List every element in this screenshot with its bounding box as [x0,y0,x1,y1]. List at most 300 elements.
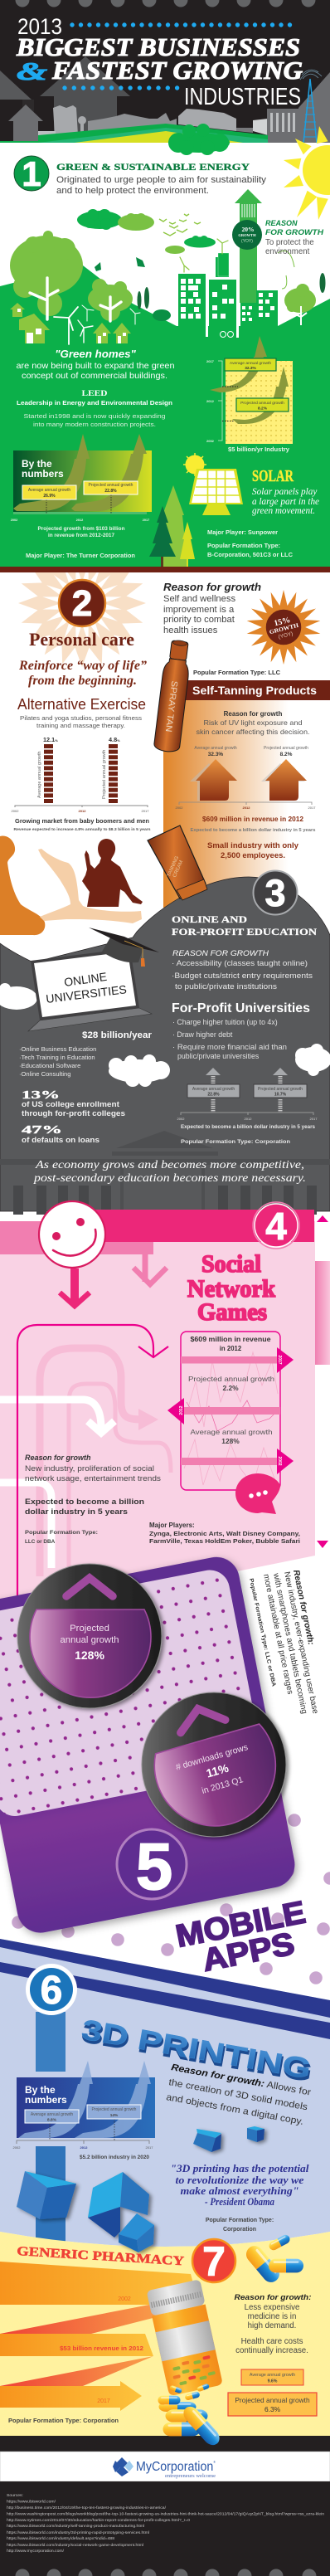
text: pharmacy reason: continually increase. [235,2346,308,2355]
section 1 description [56,175,267,196]
icon: laptop with online universities [28,948,152,1031]
heading: ampersand: & [17,56,47,85]
heading: biggest businesses: BIGGEST BUSINESSES [16,32,300,61]
text: solar description [252,487,319,516]
list: online topics: ·Tech Training in Education [19,1054,95,1061]
text: self-tanning reason: skin cancer affecting this decision. [196,728,310,736]
text: reason for growth personal care: health issues [163,626,218,635]
badge: number 5: 5 [136,1829,172,1903]
dial: downloads grows: # downloads grows [175,1742,249,1773]
text: pharmacy reason: Less expensive [245,2303,299,2312]
footer sources panel [0,2481,330,2576]
text: green homes: "Green homes" [55,348,136,360]
buildings [178,253,278,338]
heading: for-profit universities: For-Profit Universities [172,1001,310,1015]
badge: number 6: 6 [41,1969,62,2013]
icon: spilled capsules [158,2384,223,2448]
text: pilates: Pilates and yoga studios, personal fitness [20,714,142,722]
arrow: white band [0,1400,114,1568]
heading: mobile apps: APPS [200,1926,298,1979]
stats: enrollment and defaults: 47% [22,1124,62,1137]
list: for-profit facts [172,1018,287,1060]
icon: green arrow growth: (YOY) [241,239,253,244]
heading: online and for-profit education: ONLINE AND [172,915,247,925]
text: 3D reason for growth [165,2062,312,2127]
text: tanning revenue: $609 million in revenue in 2012 [202,816,304,823]
heading: mobile apps: MOBILE [173,1895,308,1955]
sources list: http://business.time.com/2012/04/19/the-top-ten-fastest-growing-industries-in-america/ [7,2505,167,2510]
chart: social network timeline: 2012 [179,1405,184,1415]
section 1 description: and to help protect the environment. [56,186,209,196]
chart: 5 billion dotted panel: 2012 [206,399,215,403]
arrow: light pink down [133,1253,167,1284]
list: for-profit facts: · Charge higher tuition (up to 4x) [172,1018,278,1026]
text: reason for growth education: ·Budget cuts/strict entry requirements [172,971,313,980]
dial: projected annual growth: annual growth [61,1635,119,1645]
decorative purple dots [12,1814,330,1984]
icon: green bush [168,124,230,155]
chart: by the numbers blue: By the [25,2084,56,2096]
badge: number 1: 1 [22,154,41,193]
text: LEED: Started in1998 and is now quickly expanding [23,412,166,420]
section 3 dark panel [0,877,330,1211]
list: online topics: ·Online Business Education [19,1045,96,1053]
text: solar: SOLAR [252,467,294,485]
text: LEED [17,390,172,428]
chart: social network timeline [167,1332,294,1490]
sources list [7,2493,325,2553]
icon: graduation cap [89,928,159,967]
stats: enrollment and defaults: of US college enrollment [22,1100,119,1108]
text: reason for growth personal care: priority to combat [163,615,235,625]
icon: speech bubble [235,1473,280,1514]
icon: wind turbines [54,239,228,344]
text: green homes: are now being built to expand the green [17,362,175,371]
text: pharmacy reason [234,2293,312,2355]
chart: 5 billion dotted panel: 2017 [206,359,215,363]
chart: education growth: Projected annual growth [258,1087,303,1092]
chart: self-tanning growth arrows: Projected annual growth [264,746,308,751]
list: for-profit facts: · Draw higher debt [172,1030,233,1039]
quote: president obama: make almost everything" [181,2185,298,2197]
icon: green arrow growth [232,189,262,303]
heading: online and for-profit education [172,915,318,937]
text: social billion dollar: dollar industry in 5 years [25,1507,128,1516]
decorative top circles [15,0,315,7]
chart: education growth [177,1068,318,1121]
icon: growth burst [246,590,321,665]
chart: by the numbers green: 26.9% [43,494,56,499]
chart: social network timeline: 2017 [277,1355,282,1365]
icon: sun [284,126,330,220]
icon: mycorporation diamonds [113,2457,133,2476]
chart: by the numbers green: Projected annual growth [89,483,133,488]
black footer band top [0,2436,330,2452]
text: major players: FarmVille, Texas HoldEm Poker, Bubble Safari [149,1537,300,1545]
chart: pharmacy growth boxes [228,2369,317,2416]
text: pharmacy reason: Reason for growth: [234,2293,312,2302]
text: solar description: green movement. [252,506,315,516]
list: for-profit facts: · Require more financial aid than [172,1043,287,1051]
text: LEED: LEED [81,390,108,398]
badge: number 3: 3 [264,872,286,914]
text: tanning revenue: 2,500 employees. [221,851,285,859]
icon: spray tan bottle [153,639,192,752]
text: rotated reason for growth mobile [248,1569,320,1715]
text: reason for growth education [172,949,313,991]
chart: orange timeline arrows: 2017 [97,2398,110,2404]
bar chart: exercise growth: 2012 [79,809,86,813]
chart: by the numbers green: 2017 [143,519,149,522]
text: rotated reason for growth mobile: more attainable at all price ranges [261,1573,294,1695]
quote: president obama [171,2163,309,2208]
sources list: http://www.washingtonpost.com/blogs/wonkblog/post/the-top-10-fastest-growing-us-industries-hint-think-hot-sauce/2012/04/17/gIQAqzZpNT_blog.html?wprss=rss_ezra-klein [7,2512,325,2515]
dial: downloads grows: 11% [205,1761,231,1780]
chart: self-tanning growth arrows: 2002 [176,806,183,810]
icon: green arrow growth: 20% [242,226,254,233]
bar chart: exercise growth [12,736,149,813]
chart: by the numbers blue: 2017 [146,2145,153,2150]
section 6 light blue panel [0,1939,330,2247]
icon: growth burst: 15% [273,616,291,628]
heading: 3D printing: 3D PRINTING [80,2017,314,2088]
text: formation type corporation: Popular Formation Type: Corporation [181,1139,290,1145]
text: pharmacy reason: high demand. [248,2321,296,2330]
badge: number 5 [117,1829,187,1903]
logo band: MyCorporation [136,2460,221,2474]
badge: number 3 [254,871,297,914]
icon: small houses [10,303,131,343]
text: self-tanning reason: Risk of UV light exposure and [204,719,303,727]
dial: downloads grows [140,1692,290,1840]
chart: 5 billion dotted panel: Average annual growth [230,361,271,366]
bar chart: exercise growth: 12.1% [43,736,58,743]
logo band [0,2452,330,2481]
text: tanning revenue: Expected to become a billion dollar industry in 5 years [191,828,316,833]
text: major players [149,1522,300,1545]
icon: solar panel [183,453,243,515]
sources list: Sources: [7,2493,23,2497]
stats: enrollment and defaults: 13% [22,1089,60,1102]
banner: self-tanning products [183,680,330,700]
text: pharmacy reason: Health care costs [241,2337,303,2346]
quote: president obama: - President Obama [205,2196,274,2208]
text: formation type LLC: Popular Formation Type: LLC [193,670,280,676]
text: green homes: concept out of commercial buildings. [22,372,167,381]
dial: projected annual growth [17,1564,162,1708]
text: pharmacy reason: medicine is in [248,2312,296,2321]
section 7 yellow panel [0,2232,330,2436]
heading: alternative exercise: Alternative Exercise [17,695,146,713]
chart: by the numbers blue: 8.8% [47,2117,57,2122]
icon: smiley face [39,1201,105,1268]
icon: tanning cream tube: CREAM [172,859,184,879]
text: reason for growth education: REASON FOR GROWTH [172,949,269,957]
heading: online and for-profit education: FOR-PROFIT EDUCATION [172,928,318,937]
text: growing market [13,818,151,831]
list: online topics: ·Online Consulting [19,1070,70,1078]
text: growing market: Revenue expected to increase 4.8% annually to $8.3 billion in 5 years [13,827,151,831]
text: projected growth: Projected growth from $103 billion [38,526,125,532]
text: pilates [20,714,142,729]
badge: number 2: 2 [72,583,92,624]
banner: self-tanning products: Self-Tanning Products [192,684,317,697]
text: reason for growth personal care: improvement is a [163,605,235,615]
text: solar major player: Popular Formation Type: [207,543,280,549]
chart: education growth: 22.8% [207,1092,220,1097]
chart: by the numbers blue: 14% [110,2113,119,2118]
sources list: https://www.ibisworld.com/industry/social-network-game-development.html [7,2543,143,2547]
text: rotated reason for growth mobile: Popular Formation Type: LLC or DBA [248,1578,277,1687]
chart: social network timeline: $609 million in revenue [191,1336,271,1343]
text: social formation type: LLC or DBA [25,1539,56,1545]
text: major players: Major Players: [149,1522,195,1529]
chart: by the numbers blue: numbers [25,2094,67,2106]
chart: by the numbers green: 2012 [76,519,83,522]
chart: education growth: 10.7% [274,1092,287,1097]
text: solar description: Solar panels play [252,487,317,497]
quote: economy grows: post-secondary education becomes more necessary. [33,1172,306,1185]
text: reason for growth personal care: Reason for growth [163,582,261,593]
text: social reason for growth [25,1454,162,1483]
text: reason for growth education: to public/private institutions [175,982,278,991]
icon: pill bottle [147,2279,223,2396]
text: rotated reason for growth mobile: with smartphones and tablets becoming [271,1571,308,1715]
heading: 3D printing: 3D PRINTING [80,2014,313,2085]
chart: education growth: 2017 [310,1117,318,1121]
chart: self-tanning growth arrows: 2017 [308,806,316,810]
heading: social network games: Social [201,1250,261,1278]
logo band: ® [213,2460,216,2464]
icon: tanning cream tube [148,825,207,900]
chart: self-tanning growth arrows: Average annual growth [194,746,237,751]
badge: number 2 [59,580,105,626]
chart: by the numbers green: Average annual growth [28,488,70,493]
chart: by the numbers green: numbers [22,468,64,480]
chart: social network timeline: 2.2% [222,1384,239,1392]
icon: laptop with online universities: ONLINE [63,970,108,989]
panel: social network games background [0,1210,330,1619]
heading: 3D printing [79,2014,314,2088]
icon: radio tower [300,70,322,143]
text: rotated reason for growth mobile: Reason for growth: [291,1569,315,1646]
text: 3D formation type [206,2218,274,2233]
list: online topics [19,1045,96,1078]
blue vertical bar [36,2012,66,2242]
callout: reason for growth: FOR GROWTH [265,228,324,236]
text: solar description: a large part in the [252,497,319,507]
green hill landscape [0,265,330,567]
skyline silhouettes [0,56,330,143]
chart: 5 billion dotted panel [206,336,293,453]
callout: reason for growth [265,219,324,256]
chart: pharmacy growth boxes: 9.6% [268,2379,278,2384]
icon: laptop with online universities: UNIVERSITIES [45,982,128,1006]
chart: education growth: Average annual growth [192,1087,235,1092]
text: self-tanning reason: Reason for growth [224,710,282,718]
chart: by the numbers green [11,434,152,522]
chart: orange timeline arrows: 2002 [118,2296,131,2302]
text: social reason for growth: Reason for growth [25,1454,91,1462]
heading: social network games [187,1250,275,1326]
icon: sunflower petals [18,572,146,667]
text: solar major player: Major Player: Sunpower [207,530,278,536]
text: LEED: into many modern construction projects. [33,421,156,428]
quote: president obama: "3D printing has the potential [171,2163,309,2174]
panel: mobile apps card [0,1553,298,1936]
text: 3D reason for growth: the creation of 3D solid models [167,2077,308,2112]
chart: 5 billion dotted panel: 2002 [206,439,215,443]
text: green homes [17,348,175,381]
quote: economy grows: As economy grows and becomes more competitive, [35,1159,304,1171]
icon: spray tan bottle: SPRAY TAN [163,680,179,733]
icon: tanning cream tube: TANNING [167,855,180,878]
text: growing market: Growing market from baby boomers and men [15,818,149,825]
callout: reason for growth: environment [265,247,310,256]
bar chart: exercise growth: 2002 [12,809,19,813]
sources list: https://www.ibisworld.com/industry/self-tanning-product-manufacturing.html [7,2524,144,2528]
heading: generic pharmacy: GENERIC PHARMACY [17,2244,184,2268]
badge: number 4: 4 [265,1205,287,1248]
bar chart: exercise growth: Projected annual growth [102,750,107,799]
chart: social network timeline: 128% [221,1437,240,1445]
icon: campus building silhouette [0,1131,330,1215]
tagline: from the beginning. [28,674,137,688]
quote: president obama: to revolutionize the way we [176,2174,304,2186]
chart: social network timeline: Average annual growth [191,1428,273,1436]
decorative bottom circles [15,2569,317,2576]
chart: social network timeline: 2002 [277,1456,282,1466]
text: pharmacy formation type: Popular Formation Type: Corporation [8,2418,119,2424]
section 2 divider [0,567,330,572]
text: self-tanning reason [196,710,310,736]
icon: growth burst: (YOY) [278,631,294,640]
text: tanning revenue: Small industry with only [207,841,299,850]
bar chart: exercise growth: 2017 [142,809,149,813]
dial: projected annual growth: Projected [70,1624,109,1634]
heading: industries: INDUSTRIES [184,84,301,110]
arrow: magenta outline box [17,1325,168,1597]
icon: clouds dark panel [0,983,330,1087]
text: 3D reason for growth: and objects from a digital copy. [165,2092,304,2127]
icon: cubes [17,2126,264,2252]
badge: number 4 [253,1202,299,1249]
callout: reason for growth: To protect the [265,238,314,247]
heading: 2013: 2013 [17,14,62,39]
tagline: Reinforce “way of life” [18,659,147,673]
text: 3D reason for growth: Reason for growth: Allows for [170,2062,312,2098]
chart: self-tanning growth arrows [176,746,316,810]
sources list: http://www.mycorporation.com/ [7,2549,65,2553]
callout: reason for growth: REASON [265,219,298,227]
chart: by the numbers blue: Projected annual growth [92,2107,137,2112]
heading: fastest growing: FASTEST GROWING [51,56,303,85]
sources list: https://www.ibisworld.com/industry/3d-printing-rapid-prototyping-services.html [7,2530,149,2535]
sources list: https://www.ibisworld.com/ [7,2499,56,2504]
text: reason for growth personal care [163,582,261,635]
heading: personal care: Personal care [29,629,134,650]
bar chart: exercise growth: Average annual growth [37,752,42,798]
decorative pale stripes [40,1348,171,1576]
badge: number 7: 7 [202,2238,226,2285]
icon: trees on hill [10,231,325,325]
logo band: entrepreneurs welcome [165,2474,216,2479]
chart: by the numbers blue [13,2061,155,2150]
chart: 5 billion dotted panel: $5 billion/yr Industry [228,447,289,453]
text: major player turner: Major Player: The Turner Corporation [26,553,135,559]
text: 3D formation type: Popular Formation Type: [206,2218,274,2223]
chart: 5 billion dotted panel: Projected annual growth [240,401,284,406]
chart: orange timeline arrows [0,2262,199,2411]
stats: enrollment and defaults: through for-profit colleges [22,1109,125,1118]
heading: social network games: Network [187,1275,275,1303]
text: projected growth: in revenue from 2012-2017 [48,533,114,538]
dial: downloads grows: in 2013 Q1 [201,1775,245,1796]
heading: social network games: Games [197,1298,267,1326]
heading: mobile apps [173,1895,308,1979]
text: 3D formation type: Corporation [223,2227,256,2233]
chart: self-tanning growth arrows: 2012 [243,806,250,810]
text: rotated reason for growth mobile: New industry, ever-expanding user base [282,1570,320,1715]
stats: enrollment and defaults [22,1089,125,1144]
text: pilates: training and massage therapy. [36,722,125,729]
icon: clouds and birds [77,209,216,254]
chart: 5 billion dotted panel: 8.2% [258,407,268,411]
sources list: http://www.nytimes.com/2012/07/30/education/harkin-report-condemns-for-profit-colleges.html?_r=0 [7,2518,191,2522]
chart: by the numbers green: 2002 [11,519,17,522]
list: online topics: ·Educational Software [19,1062,80,1069]
text: solar major player [207,530,293,558]
dial: projected annual growth: 128% [75,1648,104,1662]
text: social billion dollar: Expected to become a billion [25,1497,144,1506]
text: 28 billion: $28 billion/year [82,1030,153,1040]
section 1 title: GREEN & SUSTAINABLE ENERGY [56,161,250,173]
text: major players: Zynga, Electronic Arts, Walt Disney Company, [149,1530,300,1537]
chart: social network timeline: Projected annual growth [188,1375,274,1383]
chart: social network timeline: in 2012 [220,1345,242,1352]
text: LEED: Leadership in Energy and Environmental Design [17,399,172,407]
list: for-profit facts: public/private universities [177,1052,260,1060]
tagline [18,659,147,688]
stats: enrollment and defaults: of defaults on loans [22,1136,99,1144]
text: social reason for growth: network usage, entertainment trends [25,1474,162,1483]
text: reason for growth personal care: Self and wellness [163,594,235,604]
chart: pharmacy growth boxes: Projected annual growth [235,2396,310,2404]
chart: self-tanning growth arrows: 8.2% [280,752,293,757]
decorative navy bands [0,1939,330,2039]
text: expected billion dollar education: Expected to become a billion dollar industry in 5 years [181,1125,316,1130]
badge: number 1 [14,154,49,193]
chart: education growth: 2012 [245,1117,252,1121]
icon: butterflies [95,257,145,271]
text: reason for growth education: · Accessibility (classes taught online) [172,959,308,967]
right orange panel [163,700,330,908]
header banner [0,0,330,143]
text: social formation type: Popular Formation Type: [25,1530,98,1536]
chart: orange timeline arrows: $53 billion revenue in 2012 [60,2345,143,2352]
text: social billion dollar [25,1497,144,1516]
chart: by the numbers blue: 2012 [80,2145,88,2150]
chart: pharmacy growth boxes: 6.3% [264,2405,281,2413]
icon: green arrow growth: GROWTH [238,233,256,237]
icon: pine trees [149,485,195,567]
bar chart: exercise growth: 4.8% [109,736,120,743]
icon: yoga silhouettes [0,835,143,935]
chart: education growth: 2002 [177,1117,185,1121]
chart: by the numbers blue: 2002 [13,2145,21,2150]
chart: by the numbers green: By the [22,458,52,470]
icon: growth burst: GROWTH [269,622,299,635]
